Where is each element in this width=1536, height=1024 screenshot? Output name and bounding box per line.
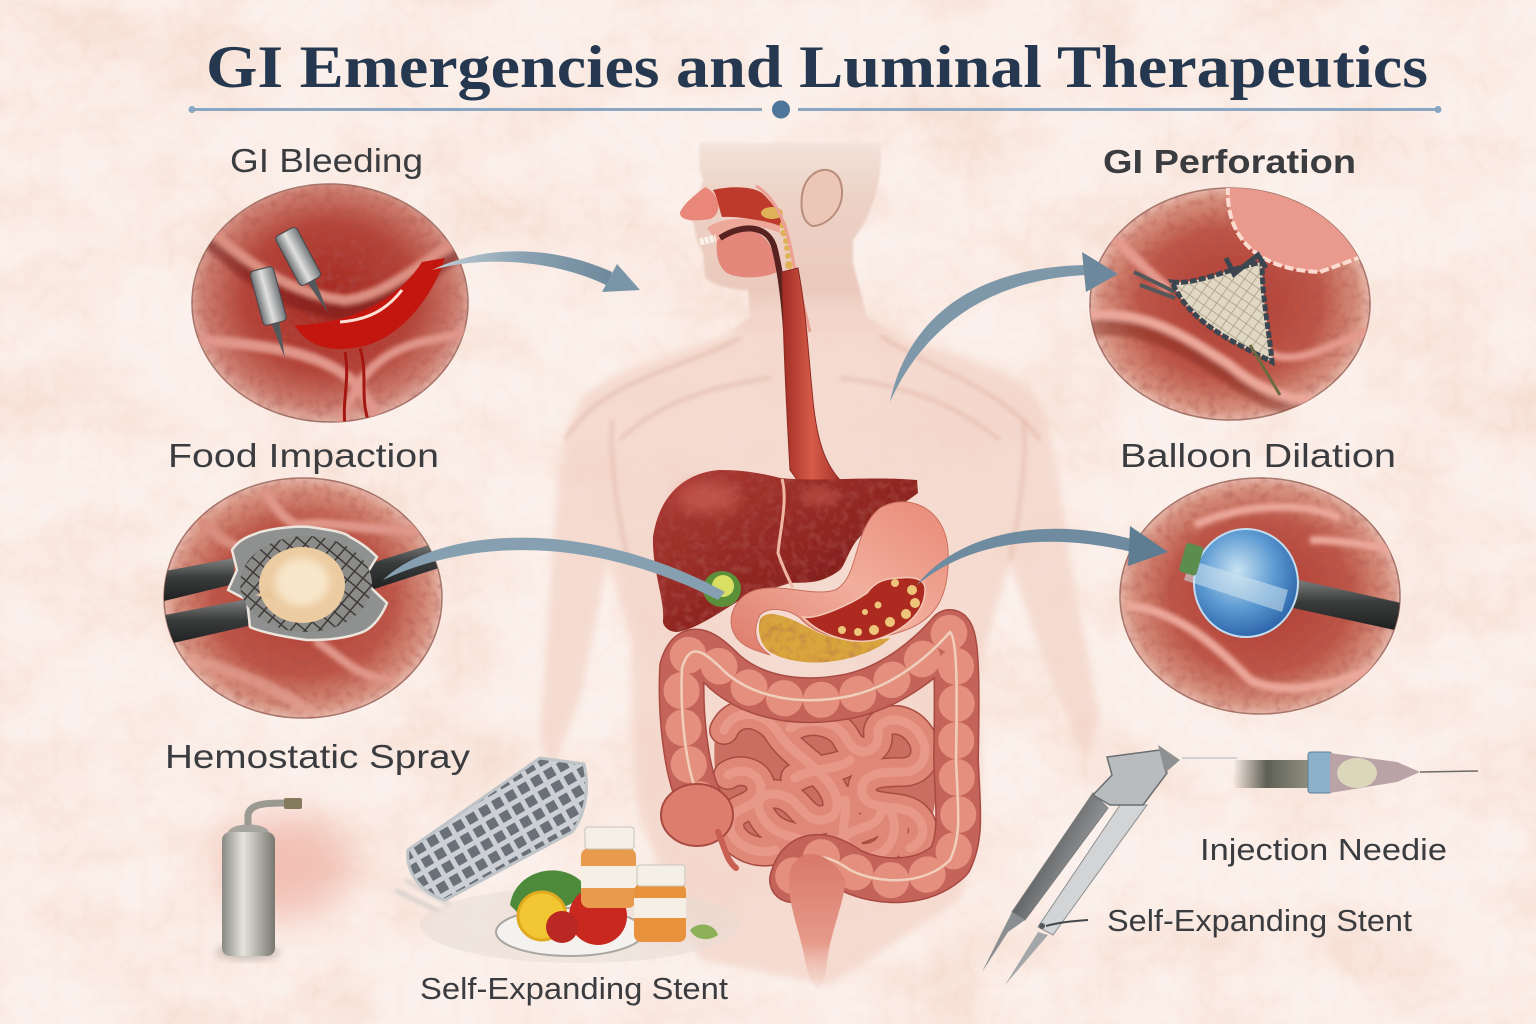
human body silhouette	[540, 317, 1100, 985]
bleeding ulcer window	[803, 578, 925, 641]
stomach	[731, 502, 948, 655]
panel: food impaction view	[160, 478, 445, 718]
title: GI Emergencies and Luminal Therapeutics	[206, 34, 1428, 100]
arrow: food impaction to gallbladder	[383, 538, 725, 600]
icon: injection needle	[1233, 752, 1478, 793]
icon: self-expanding metal stent	[395, 758, 587, 912]
throat wall	[720, 228, 786, 330]
icon: balloon collar	[1178, 542, 1204, 576]
title divider	[188, 100, 1442, 118]
small intestine	[714, 700, 937, 865]
panel: balloon dilation view	[1120, 478, 1410, 714]
icon: plate of vegetables and fruit	[496, 870, 644, 956]
icon: medicine bottle rear	[581, 827, 636, 908]
salivary glands	[761, 207, 793, 269]
icon: basket mesh fabric	[240, 536, 372, 632]
hemostatic spray red mist	[219, 816, 351, 920]
pharynx back wall	[756, 186, 810, 332]
panel: GI bleeding endoscopic view	[192, 184, 480, 425]
icon: blue balloon	[1194, 529, 1298, 637]
icon: stent delivery device	[982, 745, 1237, 985]
label: self-expanding stent right: Self-Expanding Stent	[1107, 903, 1412, 938]
icon: food bolus	[255, 547, 345, 623]
esophagus	[782, 268, 842, 484]
nasal cavity	[713, 187, 782, 228]
heading: Food Impaction: Food Impaction	[168, 437, 439, 474]
icon: endoscope lower left	[165, 600, 248, 643]
tongue	[717, 230, 777, 277]
rectum	[789, 854, 845, 990]
icon: dilation catheter scope	[1293, 580, 1400, 630]
icon: endoscope right	[370, 546, 438, 589]
arrow: bleeding to body	[432, 251, 640, 292]
heading: Balloon Dilation: Balloon Dilation	[1120, 437, 1396, 474]
pancreas	[759, 614, 890, 663]
icon: medicine bottle front	[634, 865, 718, 942]
icon: mesh basket	[228, 527, 387, 640]
icon: endoscope upper left	[160, 558, 234, 602]
icon: hemostatic clip upper	[274, 226, 339, 319]
arrow: stomach to balloon	[916, 526, 1168, 586]
heading: GI Perforation: GI Perforation	[1103, 143, 1356, 180]
teeth	[700, 238, 716, 242]
gallbladder	[703, 571, 741, 607]
colon	[682, 632, 958, 880]
palate	[707, 219, 780, 240]
label: self-expanding stent bottom: Self-Expanding Stent	[420, 971, 728, 1006]
icon: hemostatic spray canister	[216, 798, 302, 960]
arrow: body to perforation	[890, 252, 1118, 402]
liver	[653, 470, 918, 632]
icon: ear	[801, 170, 842, 226]
icon: perforation mesh stent	[1134, 255, 1280, 395]
label: injection needle: Injection Needie	[1200, 832, 1447, 867]
nose	[680, 187, 718, 220]
heading: GI Bleeding: GI Bleeding	[230, 142, 423, 179]
pointer line	[1046, 920, 1088, 926]
heading: Hemostatic Spray: Hemostatic Spray	[165, 738, 471, 775]
icon: balloon catheter wire	[1184, 560, 1288, 612]
panel: GI perforation stent view	[1090, 186, 1380, 420]
glass table shadow	[420, 887, 740, 963]
icon: hemostatic clip lower	[249, 266, 296, 361]
cecum and appendix	[661, 784, 736, 868]
head and face	[680, 143, 890, 332]
